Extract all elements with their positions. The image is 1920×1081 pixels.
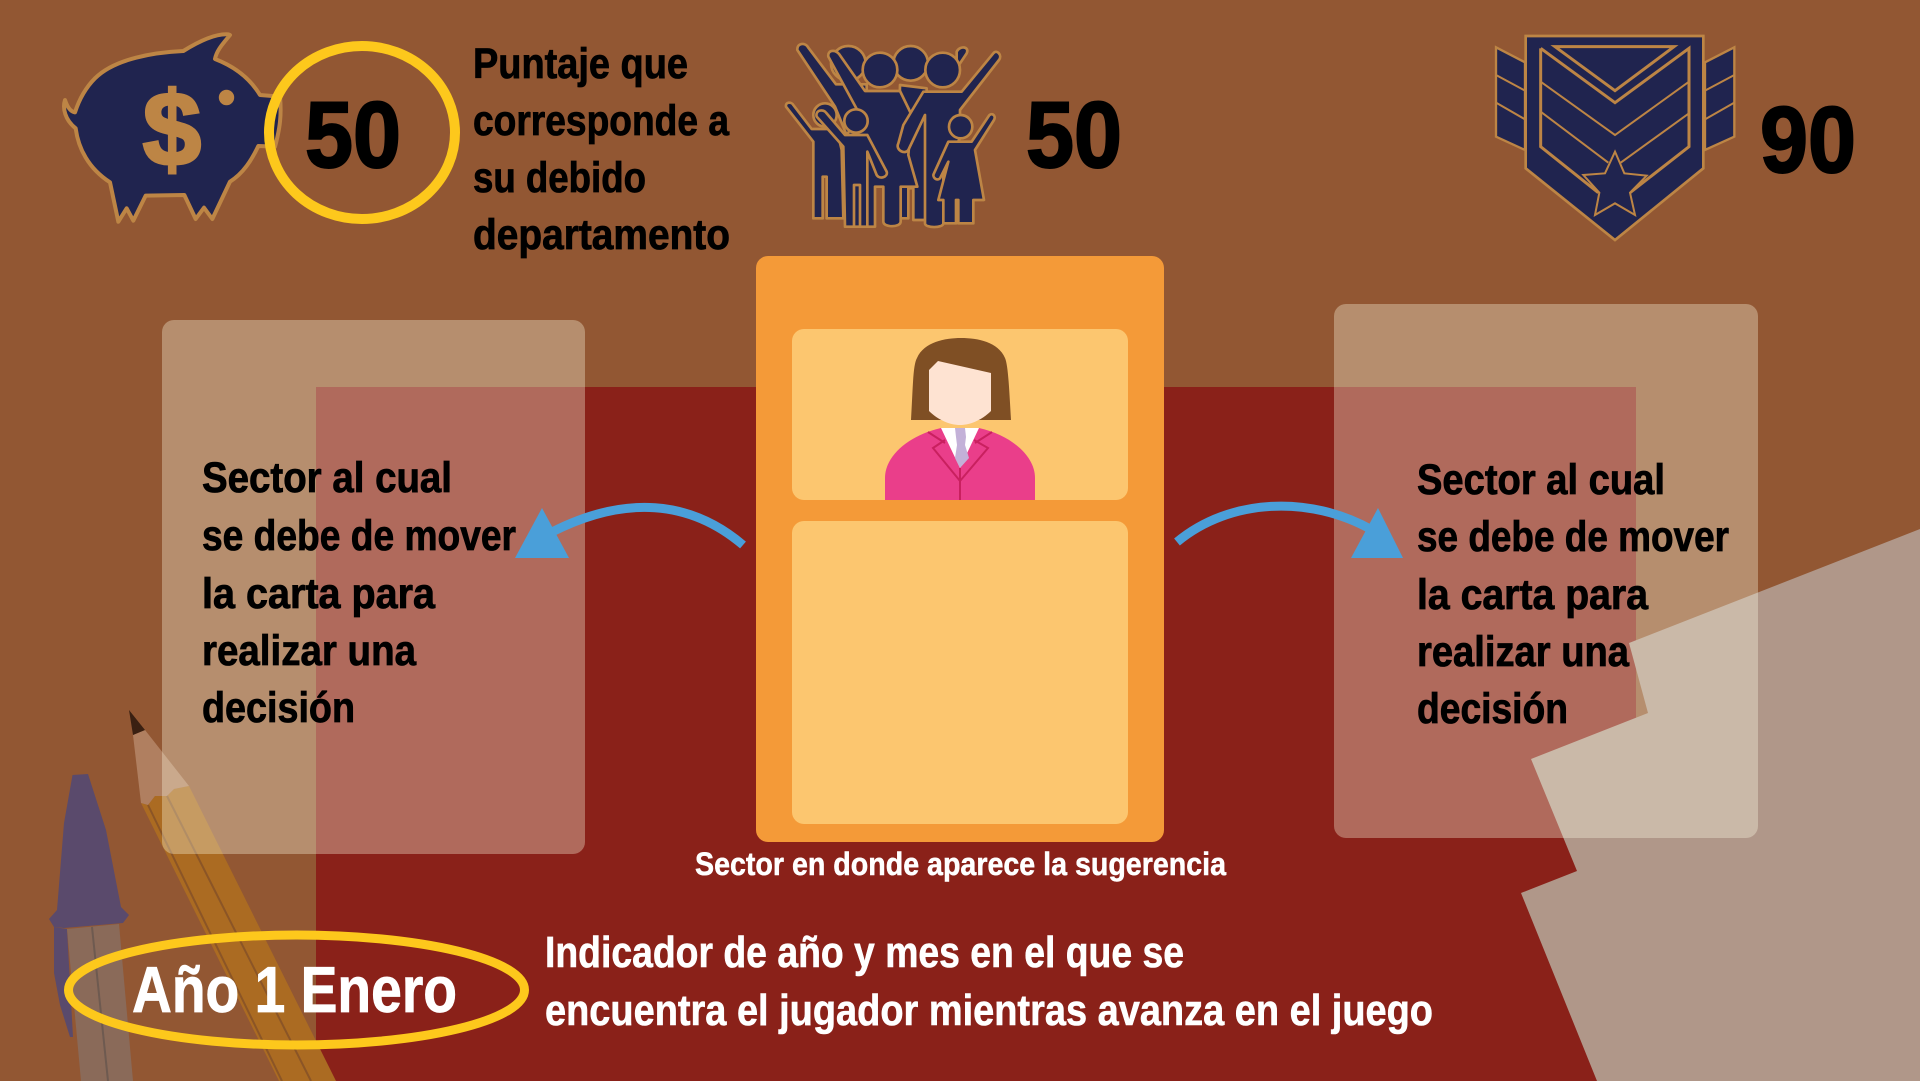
text: date indicator explanation: Indicador de año y mes en el que se bbox=[545, 928, 1184, 977]
text: right sector description: Sector al cual bbox=[1417, 456, 1665, 504]
card suggestion area bbox=[792, 521, 1128, 824]
card bbox=[756, 256, 1164, 842]
text: left sector description: Sector al cual bbox=[202, 454, 452, 502]
date label: Año 1 Enero bbox=[132, 953, 457, 1026]
icon: woman in pink suit bbox=[885, 338, 1035, 500]
text: right sector description: la carta para bbox=[1417, 571, 1649, 619]
text: score explanation: Puntaje que bbox=[473, 40, 688, 88]
date indicator bbox=[68, 935, 524, 1045]
arrow: left bbox=[515, 507, 743, 558]
icon: group of people bbox=[786, 44, 1000, 227]
score circle: money bbox=[269, 46, 455, 219]
text: score explanation: su debido bbox=[473, 154, 646, 202]
text: left sector description: decisión bbox=[202, 684, 355, 732]
text: left sector description: realizar una bbox=[202, 627, 417, 675]
panel: right destination sector bbox=[1334, 304, 1758, 838]
text: date indicator explanation: encuentra el jugador mientras avanza en el juego bbox=[545, 986, 1433, 1035]
text: score explanation: departamento bbox=[473, 211, 730, 259]
card portrait area bbox=[792, 329, 1128, 500]
text: left sector description: se debe de mover bbox=[202, 512, 516, 560]
text: left sector description: la carta para bbox=[202, 570, 436, 618]
score value: rank: 90 bbox=[1760, 87, 1856, 192]
text: right sector description: decisión bbox=[1417, 685, 1568, 733]
text: left sector description bbox=[202, 454, 516, 732]
score value: people: 50 bbox=[1026, 82, 1122, 187]
icon: piggy bank bbox=[64, 34, 281, 222]
panel: left destination sector bbox=[162, 320, 585, 854]
icon: pen bbox=[49, 774, 133, 1081]
icon: military rank badge bbox=[1496, 36, 1734, 240]
red background block bbox=[316, 387, 1636, 1081]
text: date indicator explanation bbox=[545, 928, 1433, 1035]
text: right sector description bbox=[1417, 456, 1729, 733]
score value: money: 50 bbox=[305, 82, 401, 187]
piggy eye bbox=[219, 90, 234, 105]
text: score explanation bbox=[473, 40, 730, 259]
arrow: right bbox=[1177, 506, 1403, 558]
text: right sector description: realizar una bbox=[1417, 628, 1630, 676]
text: right sector description: se debe de mover bbox=[1417, 513, 1729, 561]
torn paper shape bbox=[1521, 529, 1920, 1081]
text: score explanation: corresponde a bbox=[473, 97, 730, 145]
icon: pencil bbox=[129, 710, 336, 1081]
caption: suggestion sector: Sector en donde aparece la sugerencia bbox=[695, 846, 1226, 882]
piggy dollar sign: $ bbox=[143, 71, 201, 188]
